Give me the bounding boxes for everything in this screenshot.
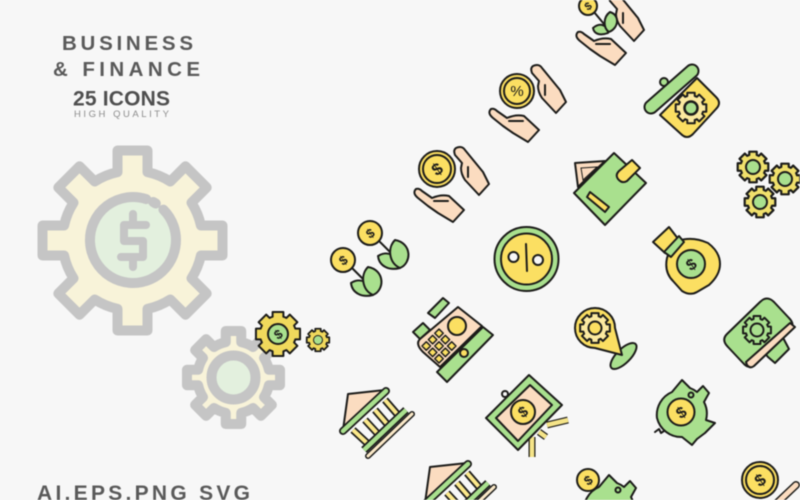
- icon: piggy bank: $: [673, 404, 690, 423]
- icon: easel with dollar picture: [486, 375, 568, 457]
- icon: cash register: [413, 298, 493, 382]
- icon: money bag: [653, 227, 720, 294]
- icon: hands with dollar coin: [414, 147, 489, 222]
- icon: book with gear: [724, 298, 795, 367]
- title: Business & Finance: & FINANCE: [53, 58, 200, 81]
- icon: large faded gear with dollar: [42, 150, 222, 330]
- icon: wallet: [574, 153, 646, 225]
- icon: piggy bank and coin, lower: [577, 469, 642, 500]
- icon: coin plants: $: [363, 225, 378, 242]
- icon: hands holding plant: [576, 0, 644, 65]
- icon: coin plants: $: [336, 252, 351, 269]
- icon: money bag: $: [683, 256, 700, 275]
- icon: piggy bank: [655, 380, 715, 445]
- title: Business & Finance: [53, 32, 200, 81]
- tagline: high quality: HIGH QUALITY: [74, 109, 170, 120]
- icon: three gears: [738, 152, 800, 217]
- icon: small gear with dollar: $: [271, 326, 286, 343]
- icon: location pin with gear: [575, 308, 640, 373]
- icon: hands with percent coin: [489, 65, 566, 142]
- icon: hands with percent coin: %: [510, 83, 524, 100]
- icon: tiny gear: [307, 329, 329, 351]
- icon: hands holding plant: $: [583, 0, 595, 13]
- icon: bank building: [343, 390, 412, 456]
- icon: hand with coin, lower right: [742, 462, 796, 500]
- title: Business & Finance: BUSINESS: [62, 32, 193, 55]
- icon: medium faded gear: [187, 331, 280, 424]
- icon: hand with coin, lower right: $: [751, 470, 770, 491]
- icon: coin plants: [331, 221, 408, 296]
- icon: small gear with dollar: [256, 312, 300, 356]
- subtitle: 25 icons: 25 ICONS: [73, 88, 170, 110]
- icon: easel with dollar picture: $: [515, 403, 532, 422]
- icon: box with gear: [651, 71, 719, 137]
- icon: large percent coin: [494, 227, 558, 291]
- icon: hands with dollar coin: $: [428, 159, 447, 180]
- icon: bank building, lower: [425, 463, 494, 500]
- icon: piggy bank and coin, lower: $: [581, 472, 596, 489]
